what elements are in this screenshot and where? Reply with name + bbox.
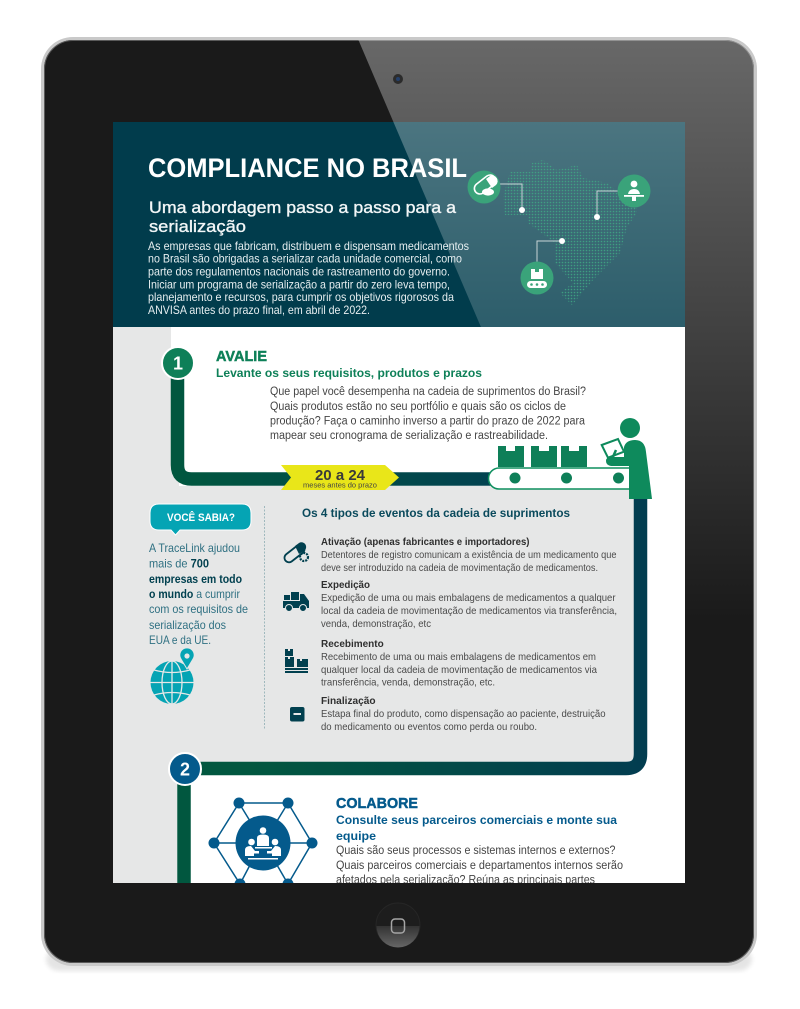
- step 1 paragraph: [270, 386, 586, 442]
- intro paragraph: [148, 239, 469, 317]
- event: activation: Ativação (apenas fabricantes e importadores): [321, 536, 530, 548]
- lower page background: [113, 327, 685, 883]
- did you know text: [149, 541, 248, 647]
- did you know bubble: [150, 504, 251, 535]
- conveyor belt: [489, 446, 645, 489]
- map callout: person: [594, 174, 650, 220]
- did you know text: A TraceLink ajudou: [149, 541, 240, 555]
- intro paragraph: ANVISA antes do prazo final, em abril de 2022.: [148, 303, 370, 317]
- header panel: [113, 122, 685, 327]
- event: shipping: Expedição: [321, 579, 370, 591]
- step 1 paragraph: produção? Faça o caminho inverso a partir do prazo de 2022 para: [270, 416, 586, 428]
- step 1 badge: 1: [173, 354, 183, 374]
- step 2 paragraph: [336, 845, 623, 886]
- event: activation: deve ser introduzido na cadeia de movimentação de medicamentos.: [321, 562, 598, 574]
- event: finalization: Estapa final do produto, como dispensação ao paciente, destruição: [321, 708, 606, 720]
- step 2 badge: 2: [180, 760, 190, 780]
- step 2 paragraph: afetados pela serialização? Reúna as principais partes: [336, 874, 595, 886]
- subtitle: [149, 198, 457, 236]
- step 1 heading: AVALIE: [216, 348, 267, 365]
- events heading: Os 4 tipos de eventos da cadeia de suprimentos: [302, 508, 570, 520]
- did you know text: serialização dos: [149, 618, 226, 632]
- step 1 paragraph: mapear seu cronograma de serialização e rastreabilidade.: [270, 430, 548, 442]
- intro paragraph: parte dos regulamentos nacionais de rastreamento do governo.: [148, 264, 450, 278]
- step 2 badge: [169, 753, 201, 785]
- icon: globe with pin: [150, 648, 194, 704]
- step 2 heading: COLABORE: [336, 795, 418, 812]
- event: shipping: local da cadeia de movimentação de medicamentos via transferência,: [321, 605, 617, 617]
- tablet shadow: [46, 948, 752, 971]
- did you know text: mais de 700: [149, 556, 209, 570]
- title: COMPLIANCE NO BRASIL: [148, 153, 467, 183]
- intro paragraph: no Brasil são obrigadas a serializar cada unidade comercial, como: [148, 252, 462, 266]
- map callout: medicine: [468, 170, 525, 213]
- step 1 paragraph: Quais produtos estão no seu portfólio e quais são os ciclos de: [270, 401, 566, 413]
- step 1 badge: [162, 347, 194, 379]
- belt wheels: [510, 472, 624, 484]
- event: receiving: transferência, venda, demonstração, etc.: [321, 676, 495, 688]
- event: receiving: [285, 638, 597, 688]
- deadline tag: meses antes do prazo: [303, 480, 377, 490]
- box 2: [531, 446, 557, 467]
- step 1 paragraph: Que papel você desempenha na cadeia de suprimentos do Brasil?: [270, 386, 586, 398]
- intro paragraph: Iniciar um programa de serialização a partir do zero leva tempo,: [148, 278, 450, 292]
- step 2 subheading: Consulte seus parceiros comerciais e monte sua: [336, 813, 617, 827]
- event: shipping: venda, demonstração, etc: [321, 618, 431, 630]
- event: receiving: Recebimento de uma ou mais embalagens de medicamentos em: [321, 651, 596, 663]
- deadline tag: 20 a 24: [315, 467, 366, 484]
- column divider: [264, 506, 265, 728]
- timeline path 1: [178, 363, 500, 479]
- event: activation: Detentores de registro comunicam a existência de um medicamento que: [321, 549, 617, 561]
- step 1 heading: [216, 348, 482, 380]
- event: finalization: Finalização: [321, 695, 376, 707]
- intro paragraph: planejamento e recursos, para cumprir os objetivos rigorosos da: [148, 290, 454, 304]
- header text: [148, 153, 469, 317]
- did you know text: EUA e da UE.: [149, 633, 211, 647]
- intro paragraph: As empresas que fabricam, distribuem e dispensam medicamentos: [148, 239, 469, 253]
- did you know bubble: VOCÊ SABIA?: [167, 511, 235, 524]
- event: activation: [283, 536, 617, 574]
- step 2 heading: [336, 795, 617, 843]
- map callout: conveyor: [520, 238, 565, 294]
- event: receiving: qualquer local da cadeia de movimentação de medicamentos via: [321, 664, 597, 676]
- camera: [393, 74, 403, 84]
- subtitle: serialização: [149, 217, 246, 236]
- event: shipping: [283, 579, 617, 630]
- event: finalization: [290, 695, 606, 733]
- step 2 subheading: [336, 813, 617, 843]
- timeline path 3: [177, 784, 191, 883]
- box 1: [498, 446, 524, 467]
- screen content: [113, 153, 685, 890]
- event: receiving: Recebimento: [321, 638, 384, 650]
- icon: pill and gear: [283, 542, 308, 564]
- did you know text: com os requisitos de: [149, 602, 248, 616]
- step 2 paragraph: Quais parceiros comerciais e departamentos internos serão: [336, 860, 623, 872]
- dotted map of Brazil: [503, 160, 637, 305]
- step 1 subheading: Levante os seus requisitos, produtos e prazos: [216, 366, 482, 380]
- box 3: [561, 446, 587, 467]
- subtitle: Uma abordagem passo a passo para a: [149, 198, 457, 217]
- screen glare: [358, 40, 754, 556]
- home button: [376, 903, 420, 948]
- did you know text: o mundo a cumprir: [149, 587, 240, 601]
- icon: truck: [283, 592, 309, 612]
- icon: minus box: [290, 707, 304, 722]
- timeline path 2: [185, 495, 640, 768]
- step 2 paragraph: Quais são seus processos e sistemas internos e externos?: [336, 845, 616, 857]
- icon: team network hexagon: [208, 798, 318, 890]
- step 2 subheading: equipe: [336, 829, 376, 843]
- did you know text: empresas em todo: [149, 572, 242, 586]
- icon: pallet: [285, 649, 308, 673]
- worker figure: [602, 418, 652, 499]
- event: finalization: do medicamento ou eventos como perda ou roubo.: [321, 721, 537, 733]
- deadline tag: [281, 465, 399, 490]
- event: shipping: Expedição de uma ou mais embalagens de medicamentos a qualquer: [321, 592, 616, 604]
